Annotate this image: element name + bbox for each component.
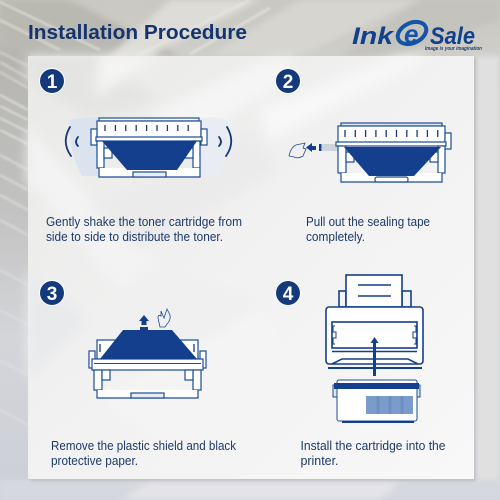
hand icon — [289, 143, 306, 158]
step 4 badge: 4 — [283, 284, 294, 305]
panel: instructions card — [28, 56, 476, 481]
step 2 text: Pull out the sealing tape — [306, 215, 430, 229]
step 1 text: side to side to distribute the toner. — [46, 230, 223, 244]
step 2 badge: 2 — [283, 72, 293, 93]
sealing tape — [322, 144, 338, 151]
title: Installation Procedure — [28, 21, 247, 44]
step 3 text: protective paper. — [51, 454, 138, 468]
cartridge — [336, 123, 451, 182]
step 2 illustration: pull tape — [289, 123, 451, 182]
step 2 text — [306, 215, 430, 244]
step 4 illustration: printer and cartridge — [326, 275, 423, 423]
logo: Ink e Sale: Sale — [430, 23, 475, 50]
insertion arrow — [370, 337, 378, 376]
logo: Ink e Sale: e — [404, 19, 418, 49]
logo: Ink e Sale: Ink — [352, 23, 395, 50]
step 1 text: Gently shake the toner cartridge from — [46, 215, 242, 229]
step 2 text: completely. — [306, 230, 365, 244]
logo: Ink e Sale: Image is your imagination — [425, 46, 482, 52]
step 3 badge: 3 — [47, 284, 57, 305]
logo: Ink e Sale — [352, 18, 482, 52]
step 3 text: Remove the plastic shield and black — [51, 439, 237, 453]
step 2 badge — [275, 68, 301, 94]
step 1 badge: 1 — [47, 72, 58, 93]
step 1 text — [46, 215, 242, 244]
hand icon — [158, 309, 170, 327]
step 4 text: printer. — [300, 454, 338, 468]
step 1 badge — [39, 68, 65, 94]
cartridge — [333, 380, 420, 423]
step 3 text — [51, 439, 237, 468]
printer — [326, 275, 423, 368]
step 3 illustration: remove shield — [89, 309, 206, 398]
motion ghost — [70, 117, 229, 176]
up arrow — [139, 315, 149, 330]
step 4 text: Install the cartridge into the — [300, 439, 446, 453]
left arrow — [306, 143, 322, 152]
cartridge — [89, 330, 206, 398]
step 3 badge — [39, 280, 65, 306]
shake arcs — [66, 127, 231, 156]
step 4 text — [300, 439, 446, 468]
cartridge — [91, 118, 207, 177]
step 1 illustration: shaking cartridge — [66, 117, 231, 177]
step 4 badge — [275, 280, 301, 306]
